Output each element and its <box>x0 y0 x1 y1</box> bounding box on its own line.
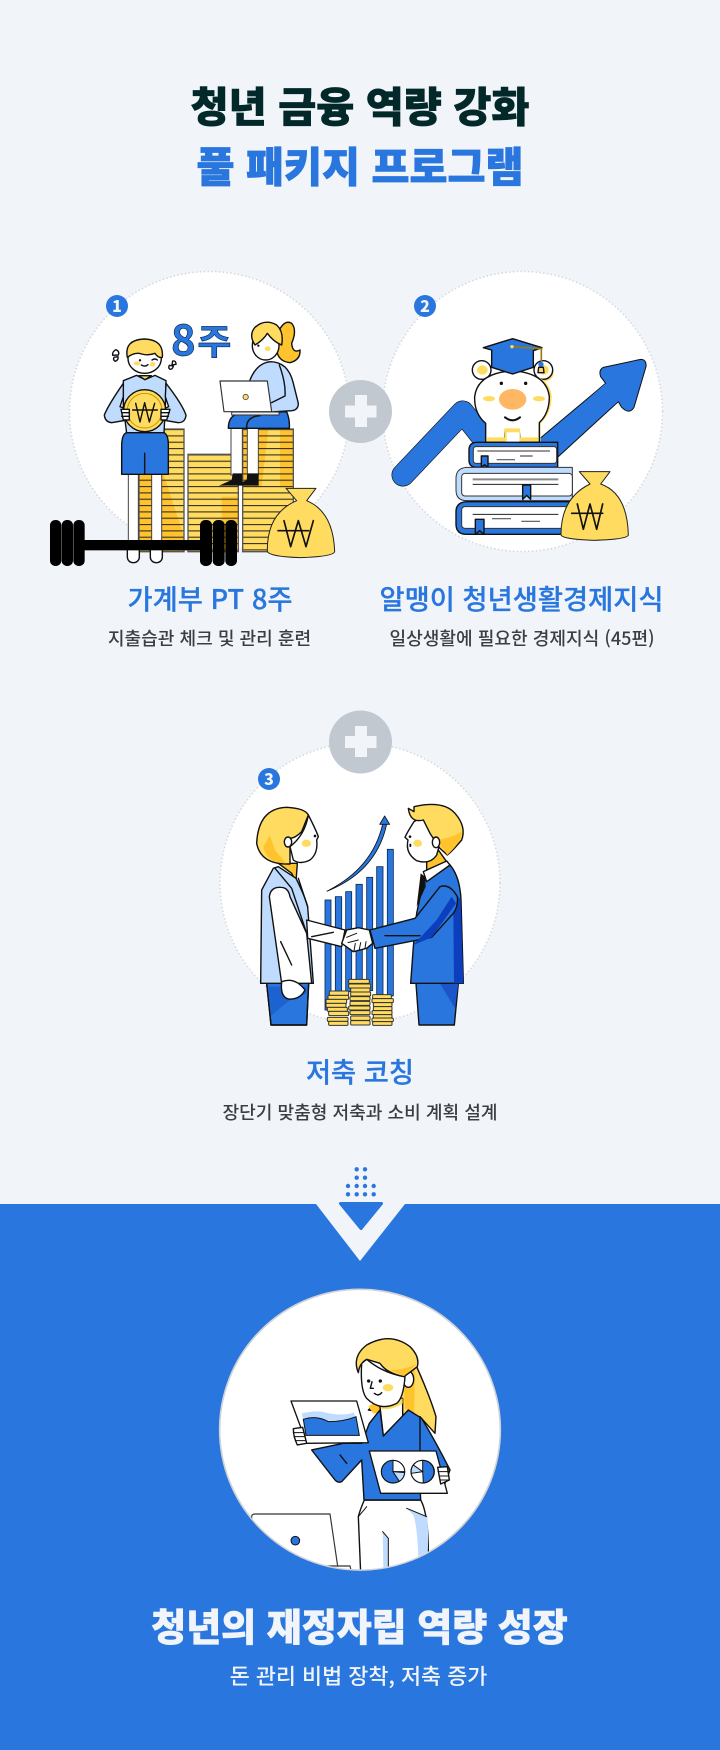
piggy with graduation cap <box>472 339 554 442</box>
text block: item 2: 알맹이 청년생활경제지식 <box>380 577 663 617</box>
woman with laptop <box>219 322 300 486</box>
plus icon between 1 and 2 <box>329 380 392 443</box>
coin piles <box>326 979 393 1025</box>
title <box>191 74 529 194</box>
icon: dotted down arrow <box>340 1167 382 1228</box>
number badge 2: 2 <box>420 293 430 317</box>
woman in white coat <box>257 807 345 1025</box>
laptop <box>252 1514 352 1573</box>
text: 8주: 주 <box>197 315 231 366</box>
chart frame <box>291 1401 368 1445</box>
handshake <box>342 928 373 952</box>
bar chart with arrow <box>325 816 393 1010</box>
illustration: piggy bank on books with arrow <box>403 339 646 540</box>
text: 8주: 8 <box>171 307 196 368</box>
money bag <box>561 472 628 540</box>
man holding coin <box>104 339 186 563</box>
text block: item 1: 지출습관 체크 및 관리 훈련 <box>108 625 311 651</box>
coin stacks <box>139 429 293 552</box>
rising arrow <box>403 359 646 475</box>
woman <box>312 1339 450 1573</box>
panel: circle 3 background <box>220 743 500 1023</box>
text block: item 1 <box>108 577 311 651</box>
panel: circle 1 background <box>70 272 350 552</box>
text: 8주 <box>171 307 231 368</box>
money bag <box>267 488 335 558</box>
illustration: budget PT 8 weeks <box>50 307 335 566</box>
book stack <box>456 442 572 534</box>
number badge 1: 1 <box>112 293 122 317</box>
pie chart tablet <box>369 1451 449 1493</box>
title: 풀 패키지 프로그램 <box>196 134 524 194</box>
title: 청년 금융 역량 강화 <box>191 74 529 134</box>
illustration: handshake savings coaching <box>257 804 463 1025</box>
text block: item 2: 일상생활에 필요한 경제지식 (45편) <box>389 625 655 651</box>
number badge 3 <box>258 766 280 790</box>
barbell <box>50 520 237 566</box>
text block: item 3 <box>222 1050 498 1125</box>
heading: result: 청년의 재정자립 역량 성장 <box>151 1597 568 1652</box>
illustration: woman presenting charts <box>220 1289 500 1573</box>
text block: item 3: 장단기 맞춤형 저축과 소비 계획 설계 <box>222 1099 498 1125</box>
plus icon above 3 <box>329 710 392 774</box>
text: result description: 돈 관리 비법 장착, 저축 증가 <box>230 1660 487 1691</box>
number badge 2 <box>414 293 436 317</box>
blue result band with notch <box>0 1204 720 1750</box>
text block: item 1: 가계부 PT 8주 <box>127 577 293 617</box>
number badge 3: 3 <box>264 766 274 790</box>
panel: circle 2 background <box>382 272 662 552</box>
text block: item 3: 저축 코칭 <box>306 1050 414 1090</box>
text block: item 2 <box>380 577 663 651</box>
man in blue suit <box>370 804 463 1025</box>
number badge 1 <box>106 293 128 317</box>
